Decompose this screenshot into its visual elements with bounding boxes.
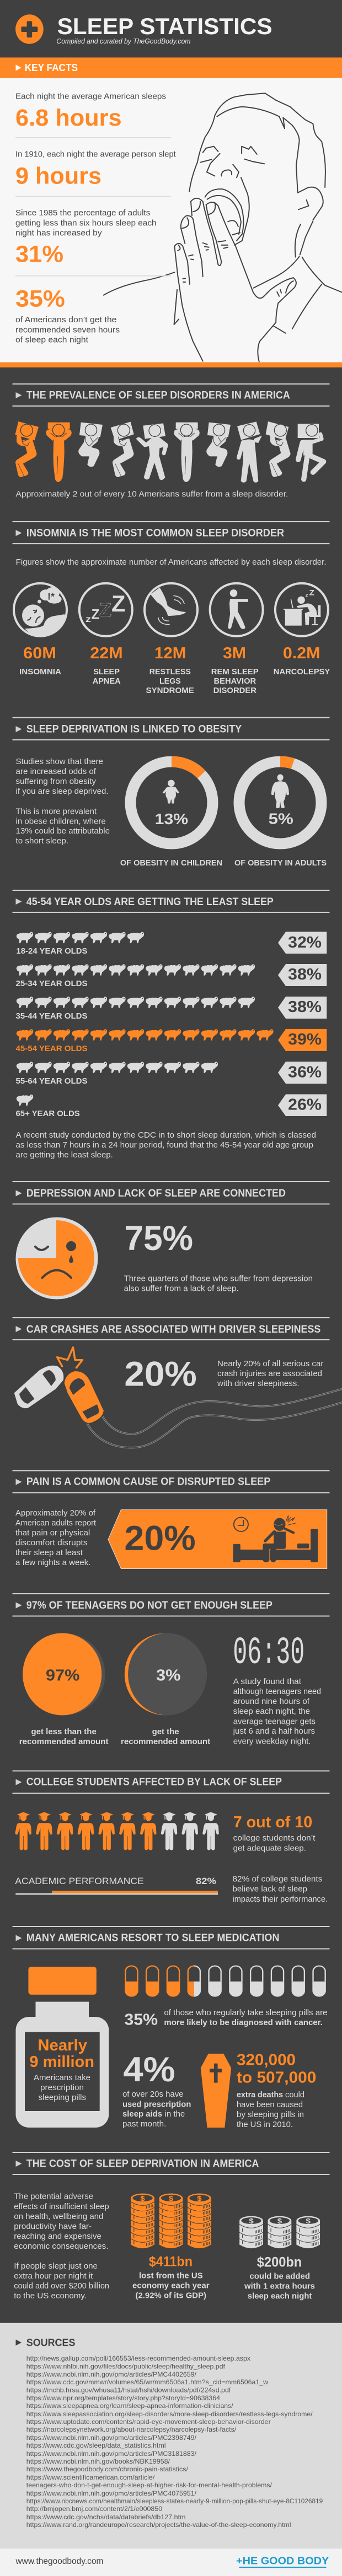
panel: depression	[12, 1181, 330, 1299]
row: 35-44: 35-44 YEAR OLDS	[15, 1011, 87, 1021]
fact: 6.8 hours: 6.8 hours	[15, 105, 122, 131]
text block: just 6 and a half hours	[233, 1727, 315, 1736]
panel: prevalence of sleep disorders	[12, 383, 330, 499]
stat: 7 out of 10: college students don’t	[233, 1833, 316, 1843]
stat: narcolepsy 0.2M	[274, 645, 330, 677]
source list	[26, 2355, 323, 2529]
text block: around nine hours of	[233, 1697, 310, 1706]
pictogram: ten pills	[125, 1966, 326, 1997]
text block: CDC study: as less than 7 hours in a 24 hour period, found that the 45-54 year old age group	[15, 1140, 313, 1150]
text block: believe lack of sleep	[233, 1885, 307, 1894]
footer	[0, 2548, 342, 2576]
fact: 35%: of Americans don’t get the	[15, 315, 116, 324]
stat: 4%: past month.	[122, 2119, 166, 2129]
chart: 3% moon: get the	[152, 1727, 179, 1736]
icon: orange coin stacks: $	[169, 2194, 173, 2202]
panel: age groups	[12, 890, 330, 1160]
stat: $200bn: sleep each night	[248, 2292, 312, 2301]
heading: depression	[12, 1181, 330, 1204]
text block: effects of insufficient sleep	[14, 2202, 109, 2211]
bar: academic performance	[15, 1876, 218, 1895]
text block: A study found that	[233, 1677, 302, 1686]
source list: https://www.ncbi.nlm.nih.gov/books/NBK19958/	[26, 2458, 170, 2465]
icon: grey coin stacks	[239, 2216, 320, 2249]
text block: Studies show that there	[15, 757, 103, 766]
row: 45-54 highlighted	[15, 1029, 327, 1053]
stat: $200bn	[244, 2254, 315, 2301]
fact: 35%: of sleep each night	[15, 335, 89, 345]
heading: cost	[12, 2152, 330, 2175]
fact: 9 hours: 9 hours	[15, 163, 101, 189]
icon: man in pain on bed	[233, 1516, 318, 1562]
text block: on health, wellbeing and	[14, 2212, 103, 2221]
stat: 4%: sleep aids	[122, 2109, 162, 2119]
donut: children 13%	[120, 761, 222, 868]
source list: https://www.thegoodbody.com/chronic-pain-statistics/	[26, 2465, 189, 2473]
source list: http://bmjopen.bmj.com/content/2/1/e000850	[26, 2505, 163, 2513]
text block: This is more prevalent	[15, 807, 97, 816]
panel: pain	[12, 1470, 330, 1569]
stat: extra deaths: to 507,000	[237, 2069, 316, 2087]
stat: extra deaths: the US in 2010.	[237, 2120, 293, 2129]
stat: restless legs 12M	[146, 645, 194, 695]
text block: suffering from obesity	[15, 777, 97, 786]
icon: insomnia: !*	[47, 591, 55, 602]
row: 18-24: 32%	[288, 934, 322, 951]
text block: their sleep at least	[15, 1548, 83, 1557]
source list: https://www.nbcnews.com/healthmain/sleepless-states-nearly-9-million-pop-pills-shut-eye-8C11026819	[26, 2497, 323, 2505]
source list: https://www.npr.org/templates/story/story.php?storyId=90638364	[26, 2394, 220, 2402]
row: 45-54 highlighted: 45-54 YEAR OLDS	[15, 1044, 87, 1053]
text block: to the US economy.	[14, 2291, 87, 2301]
text block: every weekday night.	[233, 1736, 311, 1746]
text block	[233, 1875, 328, 1904]
text block: 82% of college students	[233, 1875, 322, 1884]
heading: insomnia	[12, 521, 330, 544]
text block	[217, 1359, 323, 1388]
icon: grey coin stacks: $	[277, 2217, 282, 2225]
stat: extra deaths: extra deaths	[237, 2090, 283, 2099]
chart: 97% moon	[19, 1633, 108, 1746]
icon: orange coin stacks	[131, 2194, 211, 2249]
stat: sleep apnea 22M: SLEEP	[93, 667, 120, 677]
source list: https://www.nhlbi.nih.gov/files/docs/public/sleep/healthy_sleep.pdf	[26, 2362, 226, 2370]
panel: insomnia	[12, 521, 330, 695]
text block: CDC study: A recent study conducted by the CDC in to short sleep duration, which is classed	[15, 1130, 316, 1140]
icon: orange coin stacks: $	[140, 2194, 145, 2202]
row: 55-64: 36%	[288, 1063, 322, 1081]
stat: rem sleep 3M: REM SLEEP	[211, 667, 259, 677]
icon: insomnia	[14, 583, 67, 637]
stat: rem sleep 3M: BEHAVIOR	[214, 677, 256, 686]
source list: https://www.ncbi.nlm.nih.gov/pmc/articles/PMC4075951/	[26, 2490, 197, 2497]
icon: sleep apnea: z	[86, 615, 91, 624]
heading: sources: SOURCES	[26, 2337, 75, 2348]
icon: pill bottle: Americans take	[34, 2073, 90, 2082]
text block: Three quarters of those who suffer from depression	[124, 1274, 313, 1284]
bar: academic performance: 82%	[196, 1876, 216, 1886]
stat: 4%: 4%	[123, 2050, 175, 2089]
source list: https://www.cdc.gov/nchs/data/databriefs/db127.htm	[26, 2513, 186, 2521]
row: 18-24	[17, 932, 327, 956]
heading: prevalence	[12, 383, 330, 407]
stat: 20%: 20%	[124, 1355, 197, 1394]
text block	[15, 1508, 97, 1567]
source list: teenagers-who-don-t-get-enough-sleep-at-higher-risk-for-mental-health-problems/	[26, 2481, 272, 2489]
heading: obesity: SLEEP DEPRIVATION IS LINKED TO OBESITY	[26, 724, 242, 735]
heading: pain	[12, 1470, 330, 1493]
heading: teenagers	[12, 1593, 330, 1616]
source list: https://www.ncbi.nlm.nih.gov/pmc/articles/PMC3181883/	[26, 2450, 197, 2458]
title: SLEEP STATISTICS	[57, 13, 272, 39]
illustration: yawning man	[104, 93, 342, 361]
stat: insomnia 60M: INSOMNIA	[19, 667, 61, 677]
panel: teenagers	[12, 1593, 330, 1746]
source list: https://www.cdc.gov/sleep/data_statistics.html	[26, 2442, 165, 2449]
icon: sleep apnea	[79, 583, 132, 636]
row: 55-64	[15, 1062, 327, 1086]
icon row: ten sleeping figures	[15, 421, 324, 483]
stat: restless legs 12M: 12M	[154, 645, 186, 662]
chart: 3% moon	[121, 1633, 210, 1746]
text block: CDC study	[15, 1130, 316, 1160]
icon: pill bottle: sleeping pills	[39, 2093, 86, 2102]
icon: sleep apnea: Z	[99, 599, 111, 620]
stat: $411bn	[132, 2254, 210, 2301]
stat: restless legs 12M: SYNDROME	[146, 686, 194, 695]
text block: Approximately 20% of	[15, 1508, 96, 1518]
stat: 35% cancer	[124, 2008, 328, 2029]
heading: prevalence: THE PREVALENCE OF SLEEP DISORDERS IN AMERICA	[26, 390, 290, 402]
panel: cost of sleep deprivation	[12, 2152, 330, 2301]
stat: extra deaths: have been caused	[237, 2100, 303, 2109]
source list: https://www.cdc.gov/mmwr/volumes/65/wr/mm6506a1.htm?s_cid=mm6506a1_w	[26, 2378, 268, 2386]
text block: If people slept just one	[14, 2261, 98, 2271]
panel: obesity	[12, 717, 330, 868]
text block: a few nights a week.	[15, 1558, 90, 1567]
donut: adults 5%: 5%	[269, 810, 293, 827]
row: 25-34: 25-34 YEAR OLDS	[15, 979, 87, 988]
text block: if you are sleep deprived.	[15, 787, 108, 796]
text block	[233, 1677, 321, 1746]
heading: medication: MANY AMERICANS RESORT TO SLEEP MEDICATION	[26, 1933, 280, 1944]
subtitle: Compiled and curated by TheGoodBody.com	[56, 37, 190, 45]
stat: restless legs 12M: LEGS	[159, 677, 181, 686]
stat: 7 out of 10: 7 out of 10	[233, 1814, 312, 1831]
stat: sleep apnea 22M: APNEA	[93, 677, 121, 686]
text block: although teenagers need	[233, 1687, 321, 1696]
heading: teenagers: 97% OF TEENAGERS DO NOT GET ENOUGH SLEEP	[26, 1600, 272, 1611]
chart: 3% moon: recommended amount	[121, 1737, 210, 1746]
row: 65+	[15, 1094, 327, 1118]
text block: CDC study: are getting the least sleep.	[15, 1150, 113, 1160]
panel: college students	[12, 1771, 330, 1904]
stat: $411bn: lost from the US	[139, 2271, 203, 2281]
source list: https://mchb.hrsa.gov/whusa11/hstat/hshi/downloads/pdf/224sd.pdf	[26, 2386, 231, 2394]
stat: rem sleep 3M: DISORDER	[213, 686, 256, 695]
callout: orange 20% tag: 20%	[124, 1519, 196, 1558]
footer url: www.thegoodbody.com	[15, 2557, 103, 2566]
stat: 7 out of 10: get adequate sleep.	[233, 1843, 306, 1853]
text block: discomfort disrupts	[15, 1538, 88, 1547]
text block	[124, 1274, 313, 1294]
logo: the good body: +HE GOOD BODY	[236, 2555, 329, 2566]
row: 65+: 65+ YEAR OLDS	[15, 1109, 80, 1118]
stat: 35% cancer: 35%	[124, 2011, 158, 2029]
chart: 3% moon: 3%	[156, 1666, 180, 1684]
caption: Approximately 2 out of every 10 Americans suffer from a sleep disorder.	[15, 489, 288, 499]
icon: narcolepsy: z	[306, 593, 308, 598]
text block: also suffer from a lack of sleep.	[124, 1284, 239, 1294]
donut: adults 5%: OF OBESITY IN ADULTS	[234, 858, 327, 868]
stat: $411bn: (2.92% of its GDP)	[136, 2291, 206, 2301]
stat: extra deaths: 320,000	[237, 2052, 296, 2069]
fact: 9 hours: In 1910, each night the average person slept	[15, 149, 177, 159]
text block: to short sleep.	[15, 836, 68, 846]
stat: 4%: in the	[164, 2109, 185, 2119]
icon: pill bottle: prescription	[40, 2083, 84, 2092]
stat: 75%: 75%	[124, 1219, 193, 1258]
text block: American adults report	[15, 1518, 97, 1528]
bar: academic performance: ACADEMIC PERFORMANCE	[15, 1876, 144, 1886]
text block: reaching and expensive	[14, 2232, 101, 2241]
source list: https://www.sleepassociation.org/sleep-disorders/more-sleep-disorders/restless-legs-syndrome/	[26, 2410, 313, 2418]
icon: orange coin stacks: $	[197, 2194, 202, 2202]
stat: sleep apnea 22M: 22M	[90, 645, 123, 662]
heading: college students: COLLEGE STUDENTS AFFECTED BY LACK OF SLEEP	[26, 1777, 282, 1788]
heading: pain: PAIN IS A COMMON CAUSE OF DISRUPTED SLEEP	[26, 1476, 271, 1488]
icon: orange plus badge	[15, 14, 44, 44]
fact: 9 hours	[15, 149, 177, 189]
stat: insomnia 60M: 60M	[23, 645, 56, 662]
icon: narcolepsy: Z	[309, 589, 314, 597]
text block: average teenager gets	[233, 1717, 316, 1726]
text block: that pain or physical	[15, 1528, 90, 1538]
header banner	[0, 0, 342, 57]
heading: insomnia: INSOMNIA IS THE MOST COMMON SLEEP DISORDER	[26, 528, 284, 539]
panel: sources	[0, 2323, 342, 2548]
text block: extra hour per night it	[14, 2271, 93, 2281]
text block: economic consequences.	[14, 2242, 108, 2251]
heading: age groups: 45-54 YEAR OLDS ARE GETTING THE LEAST SLEEP	[26, 896, 274, 908]
source list: http://news.gallup.com/poll/166553/less-recommended-amount-sleep.aspx	[26, 2355, 250, 2362]
stat: extra deaths: by sleeping pills in	[237, 2110, 304, 2119]
source list: https://www.ncbi.nlm.nih.gov/pmc/articles/PMC4402659/	[26, 2371, 197, 2378]
fact: 35%: recommended seven hours	[15, 325, 120, 334]
intro text: Figures show the approximate number of Americans affected by each sleep disorder.	[16, 558, 326, 567]
stat: $200bn: could be added	[249, 2272, 310, 2281]
icon: crashing cars	[14, 1347, 104, 1423]
fact: 35%	[15, 286, 120, 345]
text block: could add over $200 billion	[14, 2281, 109, 2291]
text block: sleep each night, the	[233, 1707, 310, 1716]
heading: key facts: KEY FACTS	[25, 62, 78, 73]
heading: car crashes	[12, 1317, 330, 1340]
panel: car crashes	[12, 1317, 342, 1448]
stat: rem sleep 3M: 3M	[223, 645, 246, 662]
icon: pill bottle: 9 million	[29, 2053, 94, 2071]
stat: $411bn: economy each year	[132, 2281, 210, 2291]
icon: grey coin stacks: $	[306, 2217, 311, 2225]
stat: 35% cancer: of those who regularly take sleeping pills are	[164, 2008, 328, 2017]
stat: narcolepsy 0.2M: 0.2M	[283, 645, 320, 662]
heading: car crashes: CAR CRASHES ARE ASSOCIATED WITH DRIVER SLEEPINESS	[26, 1324, 320, 1335]
icon: grey coin stacks: $	[249, 2217, 254, 2225]
text block: The potential adverse	[14, 2192, 93, 2201]
panel: sleep medication	[12, 1926, 330, 2129]
source list: https://www.rand.org/randeurope/research/projects/the-value-of-the-sleep-economy.html	[26, 2521, 291, 2529]
chart: 97% moon: 97%	[46, 1666, 79, 1684]
icon: coffin	[201, 2054, 231, 2128]
fact: 31%: getting less than six hours sleep each	[15, 218, 157, 228]
text block: crash injuries are associated	[217, 1369, 322, 1378]
stat: 4%	[122, 2050, 191, 2129]
stat: restless legs 12M: RESTLESS	[149, 667, 191, 677]
text block: in obese children, where	[15, 816, 106, 826]
row: 45-54 highlighted: 39%	[288, 1031, 322, 1048]
stat: 4%: used prescription	[122, 2099, 191, 2109]
stat: 7 out of 10	[233, 1814, 316, 1853]
icon: sleep apnea: Z	[111, 591, 125, 616]
stat: narcolepsy 0.2M: NARCOLEPSY	[274, 667, 330, 677]
text block	[14, 2192, 109, 2301]
row: 35-44	[15, 997, 327, 1021]
text block: productivity have far-	[14, 2222, 92, 2231]
stat: sleep apnea 22M	[90, 645, 123, 686]
fact: 31%: Since 1985 the percentage of adults	[15, 208, 150, 218]
text block: are increased odds of	[15, 767, 97, 776]
icon: rem sleep behaviour	[210, 583, 263, 636]
fact: 31%: night has increased by	[15, 228, 102, 237]
callout: orange 20% tag	[108, 1509, 327, 1569]
source list: https://www.uptodate.com/contents/rapid-eye-movement-sleep-behavior-disorder	[26, 2418, 271, 2426]
text block: with driver sleepiness.	[217, 1379, 299, 1388]
fact: 6.8 hours	[15, 91, 166, 131]
row: 55-64: 55-64 YEAR OLDS	[15, 1076, 87, 1086]
text block	[15, 757, 110, 846]
icon: restless legs	[145, 583, 197, 636]
stat: rem sleep 3M	[211, 645, 259, 695]
stat: 35% cancer: more likely to be diagnosed with cancer.	[164, 2018, 323, 2027]
heading: medication	[12, 1926, 330, 1949]
source list: https://www.sleepapnea.org/learn/sleep-apnea-information-clinicians/	[26, 2402, 233, 2410]
text block: impacts their performance.	[233, 1895, 328, 1904]
source list: https://www.ncbi.nlm.nih.gov/pmc/articles/PMC2398749/	[26, 2434, 197, 2442]
row: 18-24: 18-24 YEAR OLDS	[17, 946, 87, 956]
fact: 31%: 31%	[15, 241, 63, 267]
stat: extra deaths: could	[285, 2090, 304, 2099]
donut: adults 5%	[234, 761, 327, 868]
source list: https://www.scientificamerican.com/article/	[26, 2474, 155, 2481]
row: 25-34	[15, 964, 327, 988]
chart: 97% moon: get less than the	[31, 1727, 97, 1736]
fact: 35%: 35%	[15, 286, 65, 312]
fact: 31%	[15, 208, 157, 267]
heading: college students	[12, 1771, 330, 1794]
source list: https://narcolepsynetwork.org/about-narcolepsy/narcolepsy-fast-facts/	[26, 2426, 237, 2433]
heading: cost: THE COST OF SLEEP DEPRIVATION IN AMERICA	[26, 2158, 259, 2170]
text block: 13% could be attributable	[15, 826, 110, 836]
stat: $200bn: $200bn	[257, 2254, 302, 2270]
heading: depression: DEPRESSION AND LACK OF SLEEP ARE CONNECTED	[26, 1188, 286, 1199]
heading: age groups	[12, 890, 330, 913]
panel: key facts	[0, 57, 342, 367]
stat: $411bn: $411bn	[149, 2254, 193, 2270]
stat: $200bn: with 1 extra hours	[244, 2282, 315, 2291]
icon: pill bottle: Nearly	[38, 2037, 87, 2054]
icon: pill bottle	[15, 1967, 109, 2128]
heading: obesity	[12, 717, 330, 740]
icon: sad and happy face pie	[15, 1217, 98, 1299]
stat: 4%: of over 20s have	[122, 2090, 183, 2099]
donut: children 13%: OF OBESITY IN CHILDREN	[120, 858, 222, 868]
chart: 97% moon: recommended amount	[19, 1737, 108, 1746]
row: 65+: 26%	[288, 1096, 322, 1114]
tyre tracks	[87, 1389, 342, 1448]
row: 25-34: 38%	[288, 966, 322, 983]
icon: sleep apnea: Z	[92, 607, 99, 622]
pictogram: ten graduates	[15, 1812, 219, 1850]
stat: insomnia 60M	[19, 645, 61, 677]
donut: children 13%: 13%	[155, 810, 188, 827]
row: 35-44: 38%	[288, 998, 322, 1016]
stat: extra deaths	[237, 2052, 316, 2129]
icon: narcolepsy	[275, 583, 328, 636]
text block: Nearly 20% of all serious car	[217, 1359, 323, 1368]
fact: 6.8 hours: Each night the average American sleeps	[15, 91, 166, 101]
